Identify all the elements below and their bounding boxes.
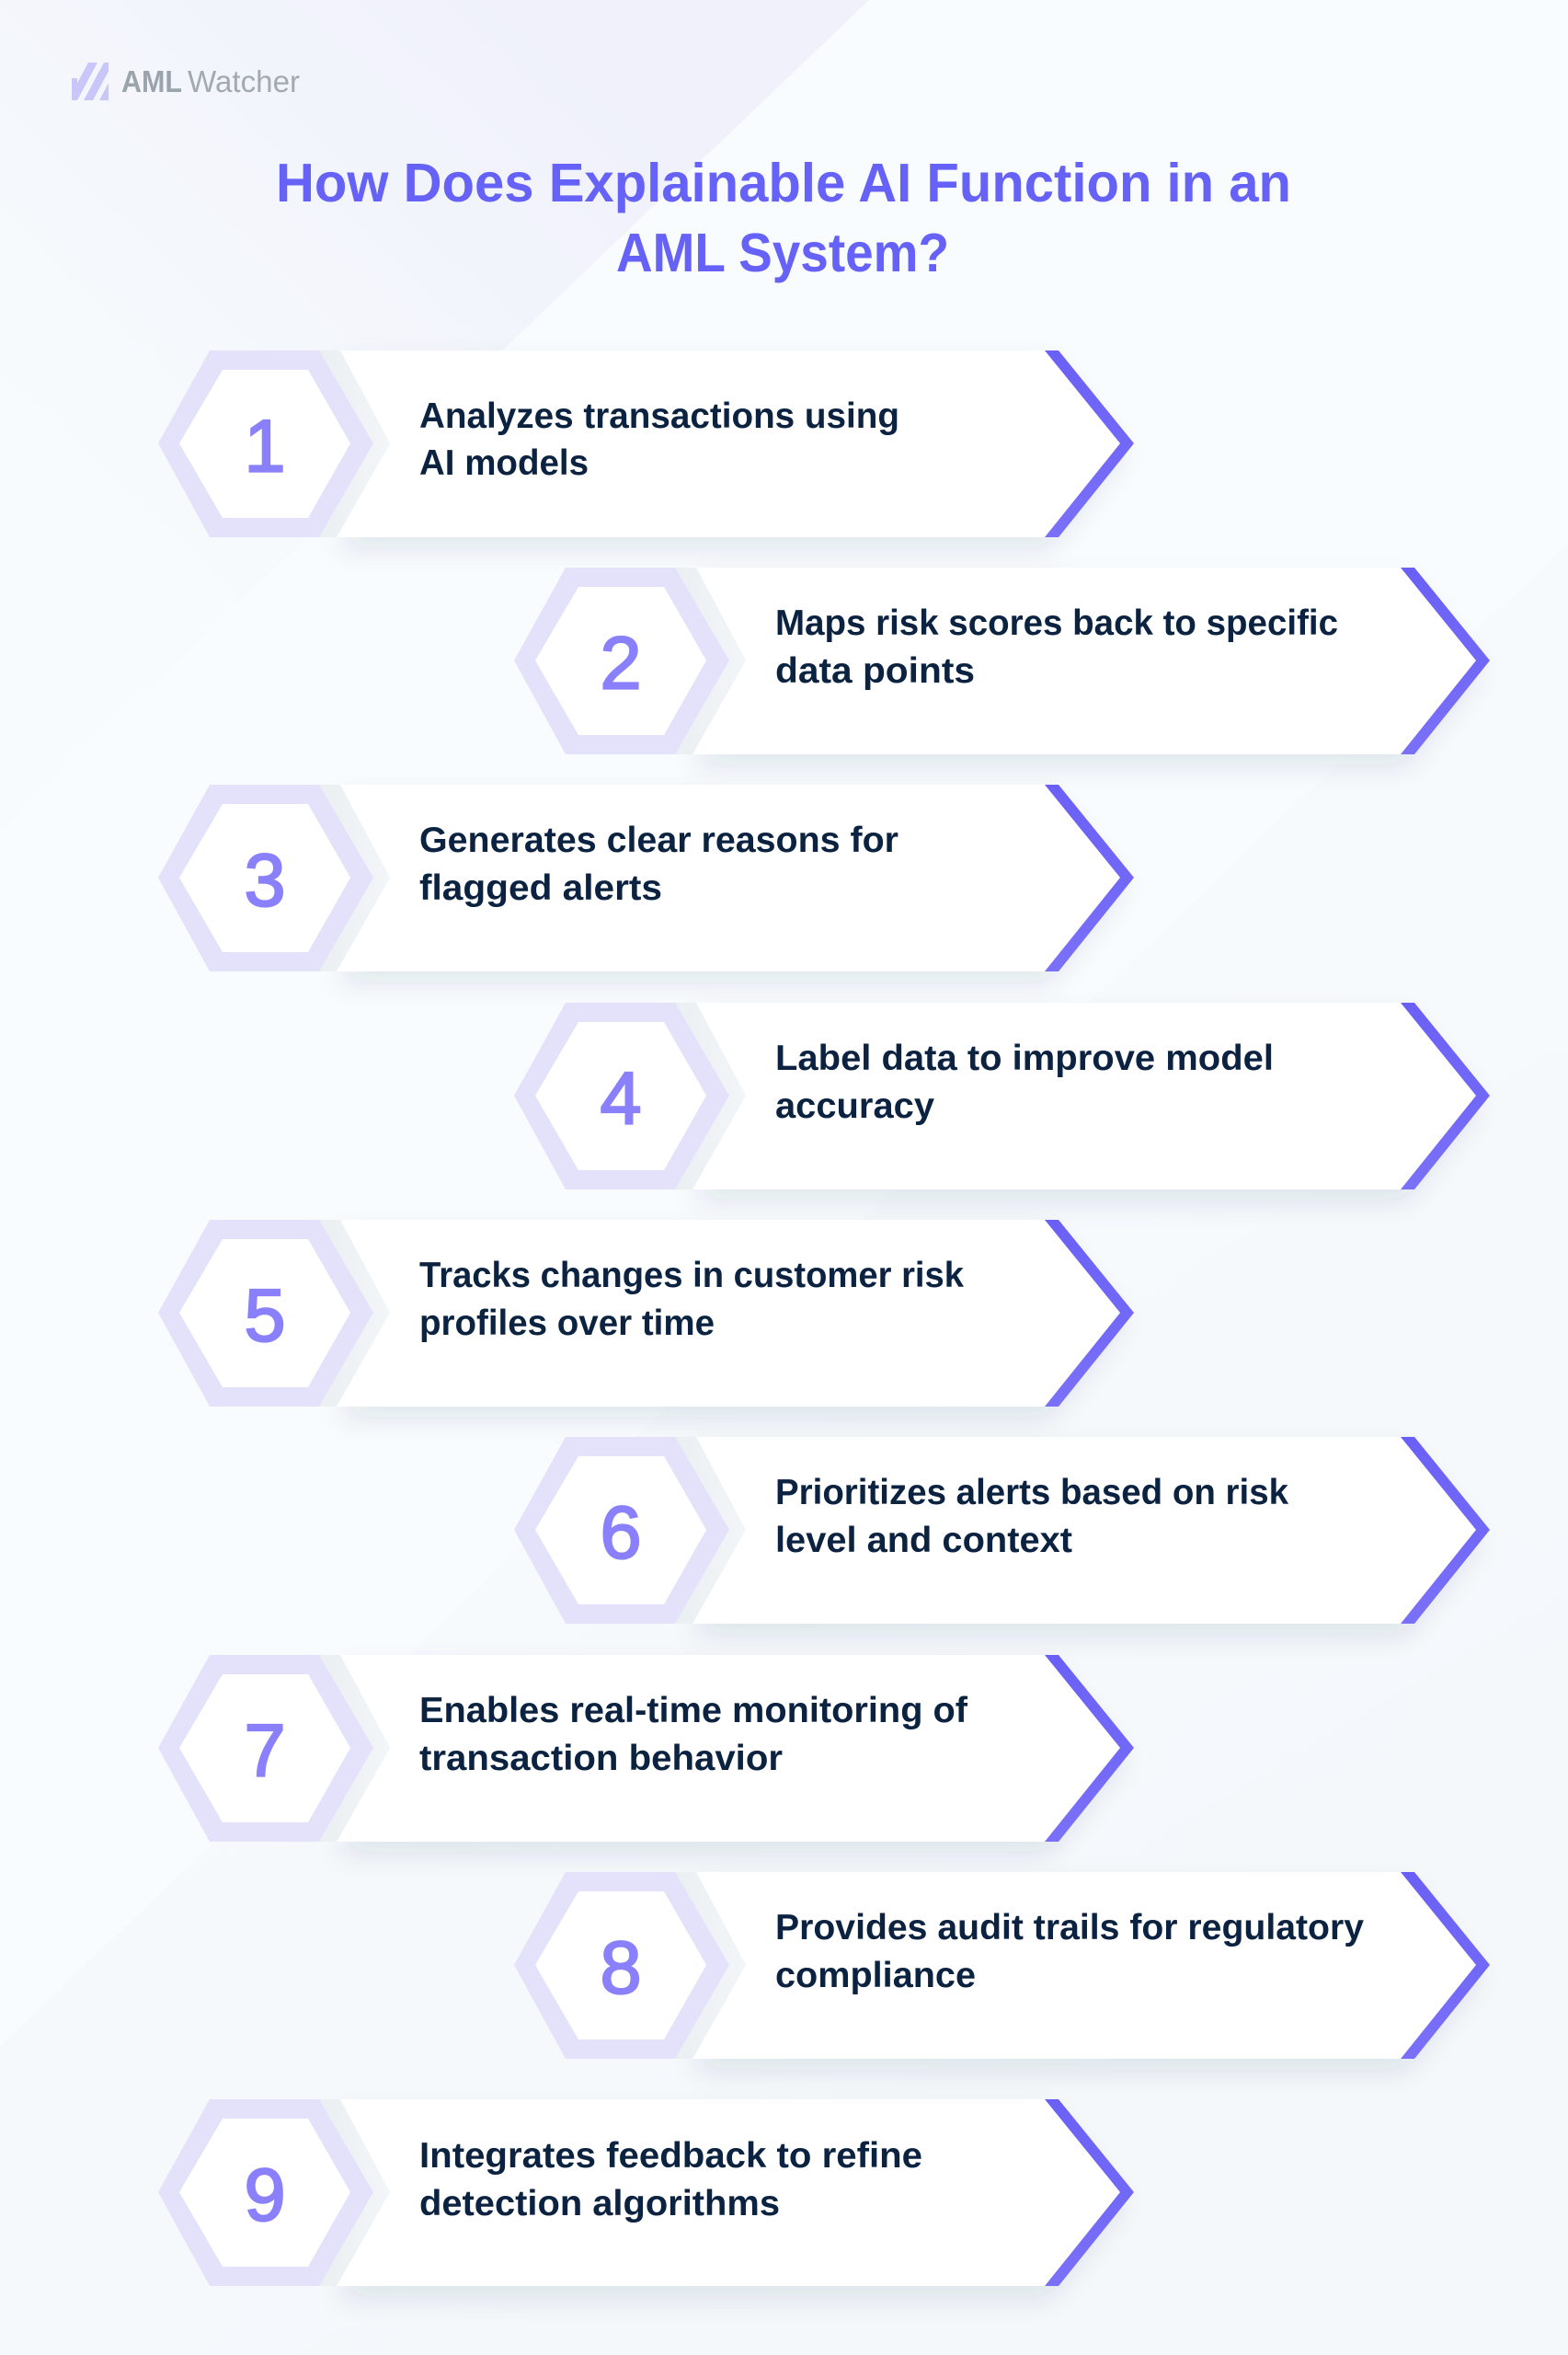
title xyxy=(276,153,1291,283)
logo wordmark: Watcher xyxy=(188,64,300,98)
logo: AML Watcher xyxy=(68,63,300,100)
step 1 chevron xyxy=(1045,350,1134,537)
title: How Does Explainable AI Function in an xyxy=(276,153,1291,213)
step 5 text: Tracks changes in customer risk xyxy=(419,1256,964,1295)
step 8 number: 8 xyxy=(600,1926,642,2009)
step 3 text xyxy=(419,821,898,908)
step 7 chevron xyxy=(1045,1655,1134,1842)
step 3 chevron xyxy=(1045,785,1134,971)
step 9 text: Integrates feedback to refine xyxy=(419,2136,922,2176)
step 1 text: Analyzes transactions using xyxy=(419,396,899,436)
step 3 card xyxy=(337,785,1124,971)
step 4 xyxy=(514,1003,1490,1189)
step 6 hexagon xyxy=(514,1437,729,1624)
step 7 number: 7 xyxy=(244,1709,286,1792)
icon: striped logo mark xyxy=(72,63,109,100)
step 8 xyxy=(514,1872,1490,2059)
step 6 card xyxy=(692,1437,1480,1624)
step 5 hexagon xyxy=(158,1220,373,1407)
step 1 xyxy=(158,350,1134,537)
step 9 card xyxy=(337,2099,1124,2286)
step 1 card xyxy=(337,350,1124,537)
step 5 text xyxy=(419,1256,964,1343)
step 5 card xyxy=(337,1220,1124,1407)
step 6 chevron xyxy=(1401,1437,1490,1624)
step 1 text: AI models xyxy=(419,443,589,483)
step 2 text: Maps risk scores back to specific xyxy=(775,603,1338,643)
step 7 hexagon xyxy=(158,1655,373,1842)
step 2 xyxy=(514,568,1490,754)
step 7 card xyxy=(337,1655,1124,1842)
step 2 card xyxy=(692,568,1480,754)
step 2 text xyxy=(775,603,1338,691)
step 3 number: 3 xyxy=(244,839,286,922)
step 8 card xyxy=(692,1872,1480,2059)
step 9 number: 9 xyxy=(244,2154,286,2237)
step 9 hexagon xyxy=(158,2099,373,2286)
logo wordmark: AML xyxy=(121,64,182,98)
logo wordmark xyxy=(121,64,300,98)
step 4 text: accuracy xyxy=(775,1086,934,1126)
step 1 text xyxy=(419,396,899,483)
step 3 text: Generates clear reasons for xyxy=(419,821,898,860)
step 4 number: 4 xyxy=(600,1058,642,1141)
step 8 text: compliance xyxy=(775,1956,976,1995)
step 1 number: 1 xyxy=(244,405,286,488)
step 5 number: 5 xyxy=(244,1275,286,1358)
step 6 text: level and context xyxy=(775,1521,1072,1560)
step 6 number: 6 xyxy=(600,1492,642,1575)
step 1 hexagon xyxy=(158,350,373,537)
step 5 chevron xyxy=(1045,1220,1134,1407)
step 2 number: 2 xyxy=(600,622,642,705)
step 6 xyxy=(514,1437,1490,1624)
step 9 text xyxy=(419,2136,922,2223)
step 4 hexagon xyxy=(514,1003,729,1189)
step 2 chevron xyxy=(1401,568,1490,754)
step 7 text xyxy=(419,1691,968,1778)
step 9 chevron xyxy=(1045,2099,1134,2286)
step 4 card xyxy=(692,1003,1480,1189)
step 4 chevron xyxy=(1401,1003,1490,1189)
step 7 text: transaction behavior xyxy=(419,1739,783,1778)
step 7 text: Enables real-time monitoring of xyxy=(419,1691,968,1730)
step 8 chevron xyxy=(1401,1872,1490,2059)
step 8 hexagon xyxy=(514,1872,729,2059)
step 2 hexagon xyxy=(514,568,729,754)
step 3 text: flagged alerts xyxy=(419,868,662,908)
step 4 text xyxy=(775,1039,1274,1126)
step 5 xyxy=(158,1220,1134,1407)
step 8 text: Provides audit trails for regulatory xyxy=(775,1908,1364,1947)
step 6 text: Prioritizes alerts based on risk xyxy=(775,1473,1288,1512)
step 6 text xyxy=(775,1473,1288,1560)
step 5 text: profiles over time xyxy=(419,1304,715,1343)
step 4 text: Label data to improve model xyxy=(775,1039,1274,1078)
step 7 xyxy=(158,1655,1134,1842)
step 9 text: detection algorithms xyxy=(419,2184,780,2223)
step 3 hexagon xyxy=(158,785,373,971)
step 8 text xyxy=(775,1908,1364,1995)
step 2 text: data points xyxy=(775,651,975,691)
step 3 xyxy=(158,785,1134,971)
step 9 xyxy=(158,2099,1134,2286)
title: AML System? xyxy=(616,223,949,283)
